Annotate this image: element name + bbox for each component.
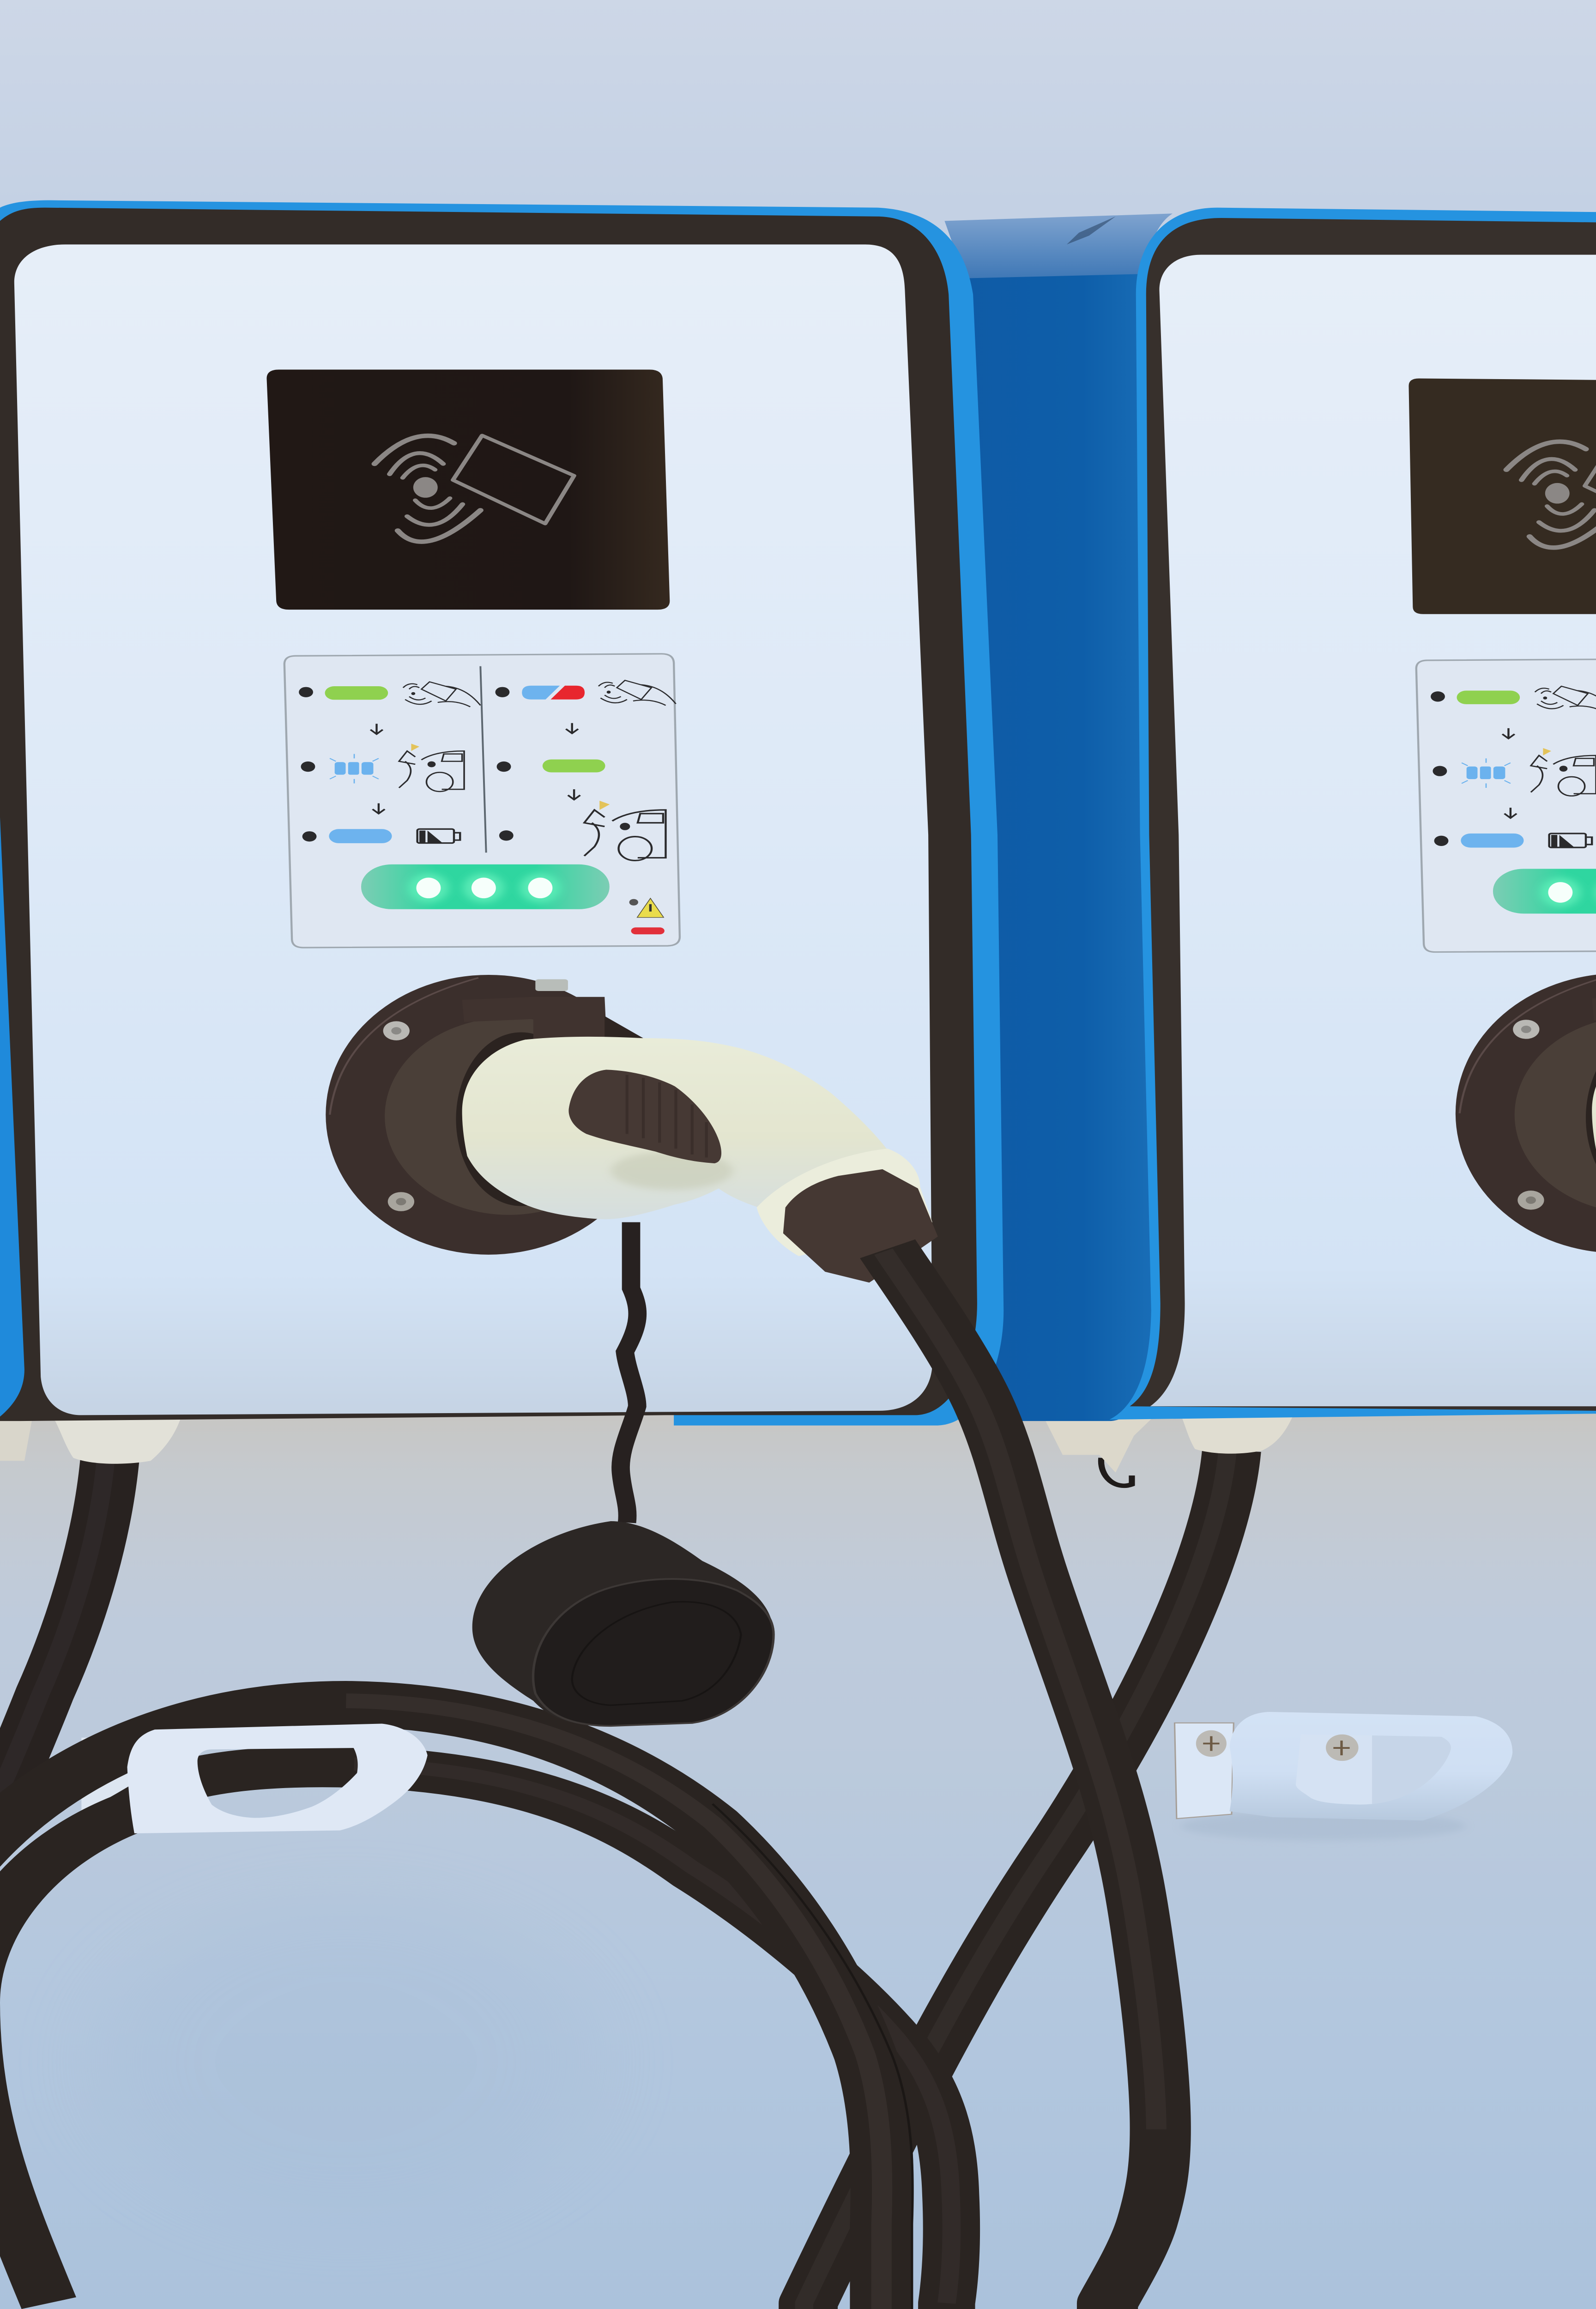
plug release grip: [568, 1070, 721, 1163]
dust cap: [472, 1521, 774, 1726]
strain relief: [783, 1169, 938, 1282]
right RFID icon: [1506, 441, 1596, 548]
grip ridges: [627, 1075, 707, 1157]
plug body: [462, 1037, 888, 1219]
plug collar: [757, 1148, 932, 1256]
instruction sticker with status lights: [284, 654, 680, 948]
cable grommets: [0, 1406, 1297, 1473]
hook body: [1230, 1712, 1512, 1820]
left charger black frame: [0, 208, 977, 1421]
RFID screen: [266, 369, 670, 610]
right RFID screen: [1409, 379, 1596, 614]
hook mounting plate: [1175, 1723, 1233, 1819]
left charger unit: [0, 200, 1004, 1426]
right socket and plug: [1456, 973, 1596, 1253]
coiled cable: outer loop: [0, 1701, 913, 2309]
wall shadow below coiled cable: [102, 1900, 590, 2224]
rear supply cable: right charger: [804, 1451, 1232, 2309]
right charger blue trim: [1109, 208, 1596, 1420]
small black cable loop behind right charger: [1101, 1458, 1132, 1486]
left edge blue trim: [0, 817, 24, 1417]
wall hook: right: [1175, 1712, 1512, 1841]
hook recess shaded half: [1372, 1735, 1451, 1804]
wall hook backplate: left: [81, 1738, 130, 1829]
main charging cable: [883, 1249, 1161, 2309]
wall hook: left: [127, 1723, 428, 1833]
charging plug: [462, 1037, 938, 1282]
left charger blue trim: [0, 200, 1004, 1426]
hook recess: [1296, 1734, 1451, 1805]
column lit top: [944, 213, 1173, 278]
shaded wall under chargers: [0, 1406, 1596, 1627]
scuff marks: [1067, 217, 1116, 244]
right charger unit: [944, 208, 1596, 1421]
screw slots: [1203, 1736, 1350, 1755]
hook screw left: [1196, 1730, 1227, 1757]
shadow under handle: [611, 1152, 733, 1190]
blue side column: [965, 265, 1161, 1421]
dust cap tether: [621, 1222, 637, 1523]
right instruction sticker: [1416, 658, 1596, 952]
right charger white face: [1150, 255, 1596, 1406]
left charger white face: [14, 244, 932, 1415]
RFID icon: [375, 435, 574, 542]
right charger black frame: [1130, 218, 1596, 1411]
hook screw right: [1326, 1735, 1359, 1761]
right connector body: [1592, 1035, 1596, 1218]
rear supply cable: left charger: [0, 1458, 110, 1841]
coiled cable: inner loop: [0, 1764, 951, 2309]
hook shadow: [1181, 1811, 1466, 1841]
socket flange with screws and clip: [326, 975, 652, 1255]
